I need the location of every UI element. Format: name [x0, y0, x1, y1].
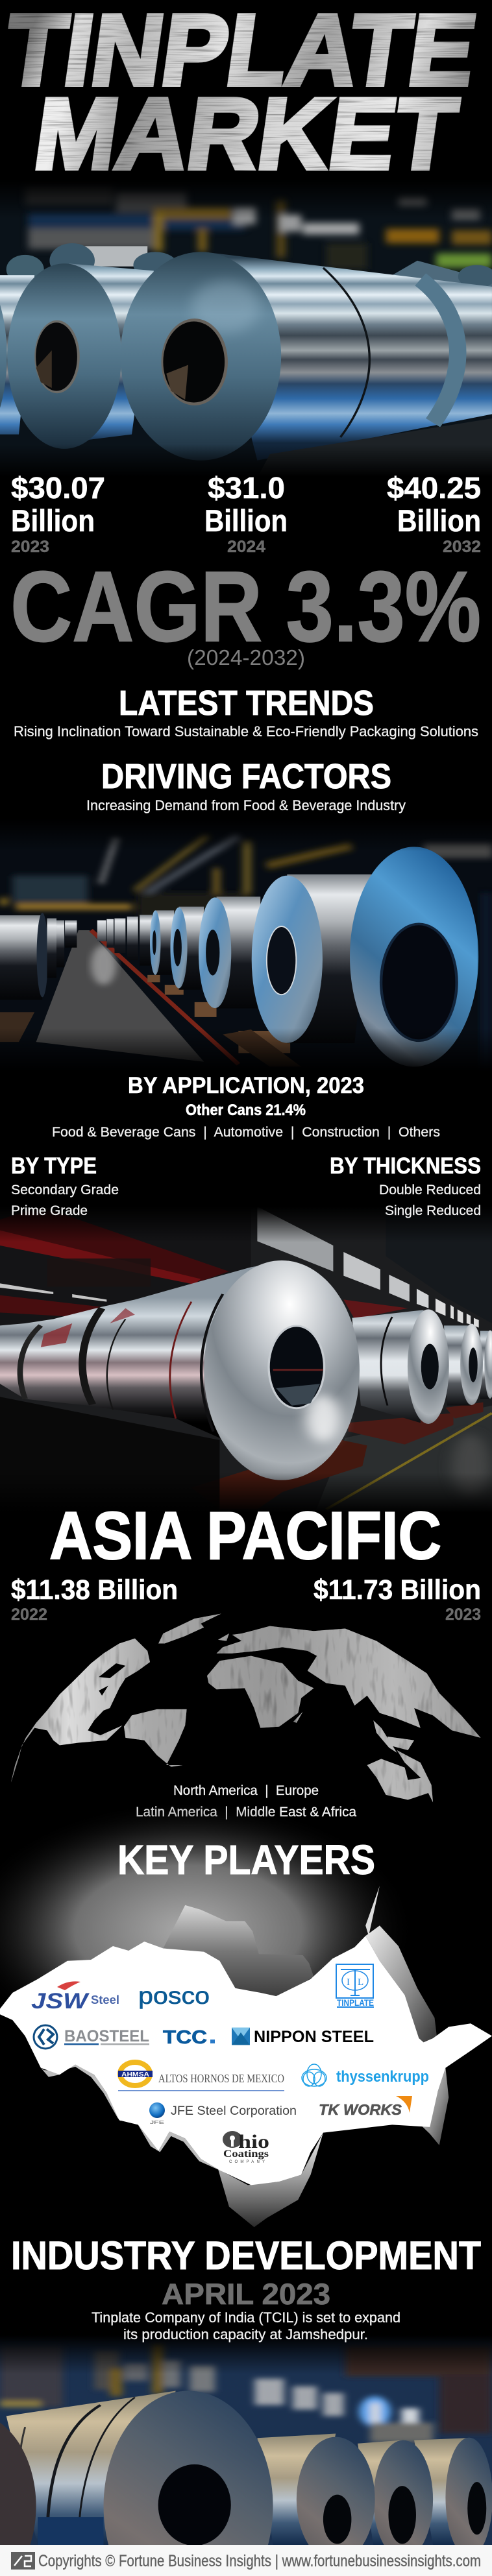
stat 2032 [387, 471, 481, 556]
factory image: row of coils [0, 816, 492, 1072]
logo: Baosteel [34, 2025, 149, 2049]
regional value 2023 [314, 1574, 481, 1624]
logo: TCIL Tinplate: TINPLATE [337, 1997, 374, 2008]
by type: Secondary Grade [11, 1183, 119, 1198]
regional value 2022: $11.38 Billion [11, 1574, 178, 1606]
stat 2023: $30.07 [11, 471, 105, 505]
by thickness [330, 1153, 481, 1218]
right flap [365, 1925, 437, 2043]
logo: TCIL Tinplate: I [347, 1977, 350, 1988]
stat 2032: $40.25 [387, 471, 481, 505]
lower edge highlights [41, 2064, 219, 2171]
logo: Ohio Coatings: COMPANY [229, 2160, 265, 2164]
regional value 2022: 2022 [11, 1606, 47, 1624]
regional value 2023: 2023 [445, 1606, 481, 1624]
floor aisle [36, 930, 204, 1062]
by type [11, 1153, 119, 1218]
logo: TCIL Tinplate: L [358, 1977, 363, 1988]
windows [257, 1207, 333, 1271]
logo: Altos Hornos de Mexico: AHMSA [121, 2071, 149, 2078]
logo: thyssenkrupp [302, 2064, 429, 2086]
regional value 2022 [11, 1574, 178, 1624]
title line: MARKET: MARKET [28, 78, 463, 190]
front blue coil [350, 847, 478, 1066]
market size figures [11, 471, 481, 556]
logo: JFE Steel: JFE [150, 2121, 165, 2125]
distant coils [480, 1331, 492, 1399]
by application: BY APPLICATION, 2023 [128, 1073, 364, 1098]
development description [92, 2309, 400, 2342]
logo: TK Works: TK WORKS [319, 2101, 402, 2118]
stat 2023: 2023 [11, 538, 49, 556]
stat 2024: Billion [204, 503, 288, 538]
logo: Altos Hornos de Mexico [118, 2062, 284, 2091]
main coil face [121, 252, 281, 461]
stat 2032: 2032 [443, 538, 481, 556]
stat 2032: Billion [397, 503, 481, 538]
logo: Nippon Steel: NIPPON STEEL [254, 2028, 374, 2046]
big coil face [204, 1260, 360, 1480]
regional value 2023: $11.73 Billion [314, 1574, 481, 1606]
logo: Baosteel: BAOSTEEL [64, 2027, 149, 2045]
pallets [349, 1413, 454, 1445]
big coil body [0, 1260, 289, 1438]
stat 2024: 2024 [227, 538, 265, 556]
by application [52, 1073, 440, 1140]
world map globe [11, 1614, 481, 1802]
stat 2024 [204, 471, 288, 556]
warehouse image: silver coils [0, 1207, 492, 1516]
development description: Tinplate Company of India (TCIL) is set to expand [92, 2309, 400, 2326]
driving factors: DRIVING FACTORS [101, 757, 391, 796]
logo: Ohio Coatings: hio [238, 2131, 269, 2152]
by type: BY TYPE [11, 1153, 97, 1179]
white tear [0, 1936, 492, 2185]
other regions list [136, 1783, 356, 1820]
bottom image: coils in plant [0, 2339, 492, 2545]
stat 2024: $31.0 [208, 471, 285, 505]
logo: JFE Steel: JFE Steel Corporation [171, 2104, 297, 2118]
logo: JSW Steel [31, 1981, 119, 2014]
region heading: Asia Pacific: ASIA PACIFIC [49, 1499, 441, 1574]
driving factors: Increasing Demand from Food & Beverage Industry [86, 797, 406, 813]
latest trends [14, 684, 478, 740]
logo: POSCO: posco [138, 1982, 210, 2009]
latest trends: LATEST TRENDS [119, 684, 374, 723]
stat 2023: Billion [11, 503, 95, 538]
by thickness: Double Reduced [379, 1183, 481, 1198]
second coil face [7, 263, 121, 449]
logo: JSW Steel: JSW [31, 1989, 90, 2014]
torn metal panel [0, 1886, 492, 2227]
logo: JSW Steel: Steel [91, 1993, 119, 2006]
stat 2023 [11, 471, 105, 556]
other regions list: Latin America | Middle East & Africa [136, 1805, 356, 1820]
left dark coil [0, 2422, 36, 2545]
by thickness: Single Reduced [385, 1203, 481, 1218]
main coil body [6, 2390, 176, 2545]
driving factors [86, 757, 406, 813]
development date: APRIL 2023 [162, 2278, 330, 2311]
footer logo [11, 2552, 35, 2570]
tear spike [365, 1886, 380, 1936]
development description: its production capacity at Jamshedpur. [123, 2326, 368, 2342]
by application: Other Cans 21.4% [186, 1101, 306, 1119]
key players heading: KEY PLAYERS [117, 1836, 375, 1883]
by type: Prime Grade [11, 1203, 88, 1218]
logo: TK Works [319, 2096, 412, 2118]
main coil face [104, 2391, 273, 2545]
main coil body [204, 252, 492, 461]
logo: Ohio Coatings: Coatings [223, 2149, 269, 2160]
glow behind key players [0, 1800, 415, 2060]
far right coil [414, 2438, 467, 2545]
second coil [252, 876, 323, 1043]
footer bar [0, 2545, 492, 2576]
logo: Ohio Coatings [223, 2131, 269, 2164]
continents [11, 1614, 481, 1802]
logo: TCIL Tinplate [336, 1964, 374, 2008]
CAGR callout: (2024-2032) [187, 645, 305, 669]
logo: thyssenkrupp: thyssenkrupp [336, 2068, 429, 2086]
small distant coils [97, 915, 152, 966]
floor [323, 1405, 492, 1493]
title [0, 0, 483, 190]
left coils [0, 915, 42, 1000]
hero image: tinplate coils [0, 180, 492, 478]
lower right flap [421, 2068, 449, 2145]
by application: Food & Beverage Cans | Automotive | Construction | Others [52, 1125, 440, 1140]
latest trends: Rising Inclination Toward Sustainable & Eco-Friendly Packaging Solutions [14, 723, 478, 740]
bottom flap [218, 2133, 323, 2227]
logo: Altos Hornos de Mexico: ALTOS HORNOS DE MEXICO [158, 2072, 284, 2085]
logo: JFE Steel [149, 2102, 297, 2125]
top flap [163, 1905, 314, 1997]
logo: TCC: TCC [163, 2027, 207, 2048]
red crane [0, 1207, 229, 1281]
left coil body [0, 275, 34, 435]
other regions list: North America | Europe [173, 1783, 319, 1798]
